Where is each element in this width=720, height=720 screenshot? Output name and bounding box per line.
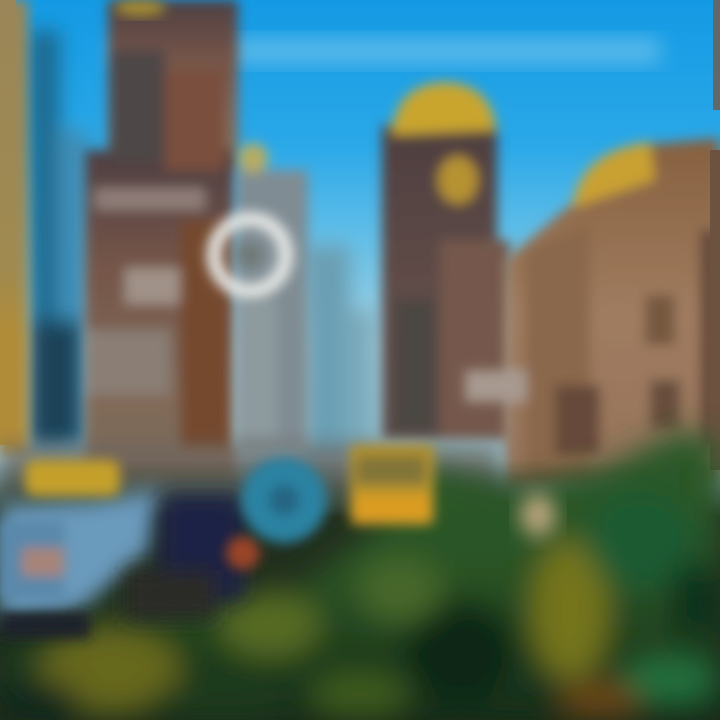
- background buildings: [28, 30, 375, 465]
- pale banner streak in sky: [110, 38, 660, 64]
- teal round sign: [241, 457, 327, 543]
- blue car: [0, 490, 160, 620]
- top right dark sliver: [713, 0, 720, 110]
- dark street base: [0, 460, 720, 720]
- orange light: [226, 536, 260, 570]
- blue car details: [0, 520, 90, 638]
- far left tan tower core: [0, 0, 16, 445]
- large right building: [465, 138, 720, 490]
- right edge fill of large building: [710, 150, 720, 470]
- yellow car roof: [25, 460, 120, 496]
- yellow sign: [350, 445, 434, 525]
- street level band: [0, 445, 500, 505]
- white ring icon: [214, 219, 286, 291]
- brown central-left tower: [85, 0, 238, 480]
- grey white building: [236, 143, 308, 450]
- yellow cap of brown tower: [114, 0, 166, 16]
- greenery: [0, 430, 720, 720]
- dark navy vehicle: [125, 495, 245, 620]
- far left tan tower soft edge: [0, 0, 28, 455]
- pale blob at tree edge: [520, 493, 556, 537]
- right dark tower: [382, 82, 510, 440]
